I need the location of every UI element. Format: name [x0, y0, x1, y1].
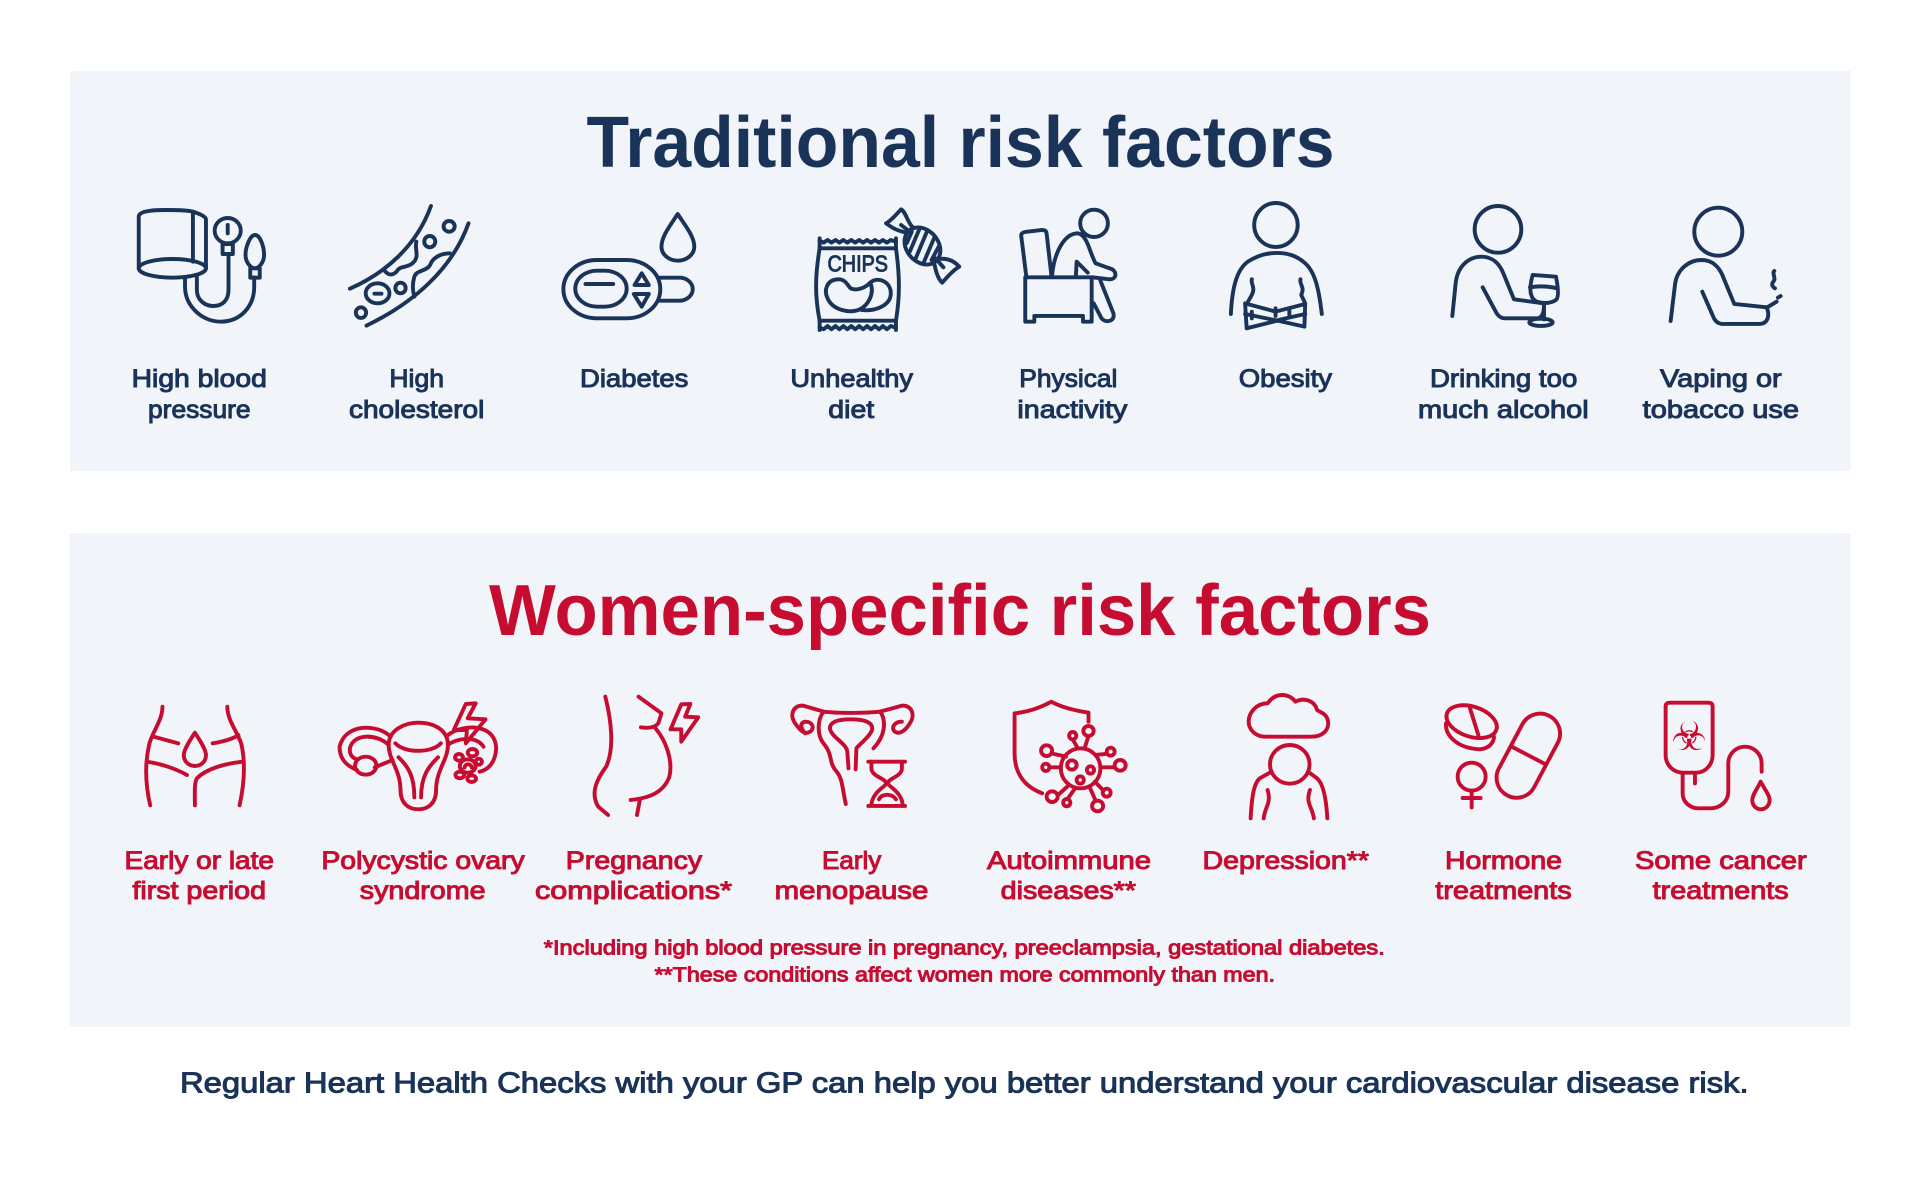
item: polycystic ovary syndrome [321, 703, 525, 905]
footnotes: **These conditions affect women more commonly than men. [654, 963, 1275, 986]
label: pregnancy complications [535, 847, 732, 905]
label: high blood pressure: High blood [132, 365, 267, 393]
icon: shield and virus [1015, 702, 1126, 811]
label: high blood pressure [132, 365, 267, 424]
label: drinking too much alcohol: Drinking too [1430, 365, 1577, 393]
label: autoimmune diseases: diseases** [1001, 877, 1136, 905]
label: pregnancy complications: Pregnancy [566, 847, 703, 875]
icon: blood pressure cuff [139, 210, 264, 322]
icon: pregnant body with bolt [595, 697, 698, 815]
label: depression: Depression** [1202, 847, 1369, 875]
label: unhealthy diet: diet [828, 396, 874, 424]
footnotes [544, 936, 1385, 986]
icon: chemo drip bag: ☣ [1671, 714, 1707, 760]
label: pregnancy complications: complications* [535, 877, 732, 905]
icon: pelvis with drop [146, 707, 244, 805]
icon: person smoking [1671, 208, 1781, 324]
label: high blood pressure: pressure [148, 396, 251, 424]
label: hormone treatments: Hormone [1445, 847, 1562, 875]
label: polycystic ovary syndrome: syndrome [360, 877, 486, 905]
label: unhealthy diet: Unhealthy [790, 365, 914, 393]
label: early menopause: menopause [775, 877, 928, 905]
item: vaping or tobacco use [1643, 208, 1799, 424]
label: autoimmune diseases [987, 847, 1151, 905]
label: early menopause: Early [822, 847, 882, 875]
label: vaping or tobacco use [1643, 365, 1799, 424]
label: some cancer treatments [1635, 847, 1807, 905]
label: hormone treatments: treatments [1435, 877, 1572, 905]
label: vaping or tobacco use: Vaping or [1660, 365, 1782, 393]
label: high cholesterol: High [389, 365, 444, 393]
icon: uterus with hourglass [792, 706, 913, 806]
item: high cholesterol [349, 206, 484, 424]
label: high cholesterol: cholesterol [349, 396, 484, 424]
item: early menopause [775, 706, 928, 905]
item: high blood pressure [132, 210, 267, 424]
icon: glucose meter and drop [563, 214, 694, 318]
label: polycystic ovary syndrome [321, 847, 525, 905]
icon: uterus with cystic ovary and bolt [340, 703, 496, 809]
label: early menopause [775, 847, 928, 905]
label: drinking too much alcohol: much alcohol [1418, 396, 1589, 424]
icon: person with measuring tape [1231, 203, 1322, 328]
panel: traditional risk factors [70, 71, 1851, 471]
label: early or late first period: Early or late [124, 847, 274, 875]
item: physical inactivity [1017, 210, 1128, 424]
label: physical inactivity [1017, 365, 1128, 424]
item: early or late first period [124, 707, 274, 905]
icon: chips packet and candy: CHIPS [828, 250, 888, 276]
icon: chips packet and candy [816, 209, 959, 330]
label: hormone treatments [1435, 847, 1572, 905]
label: autoimmune diseases: Autoimmune [987, 847, 1151, 875]
item: depression [1202, 695, 1369, 875]
label: early or late first period: first period [132, 877, 266, 905]
label: vaping or tobacco use: tobacco use [1643, 396, 1799, 424]
label: physical inactivity: Physical [1019, 365, 1117, 393]
label: polycystic ovary syndrome: Polycystic ovary [321, 847, 525, 875]
label: obesity: Obesity [1239, 365, 1333, 393]
icon: tablet, capsule and female symbol [1442, 699, 1567, 807]
label: drinking too much alcohol [1418, 365, 1589, 424]
footnotes: *Including high blood pressure in pregnancy, preeclampsia, gestational diabetes. [544, 936, 1385, 959]
icon: chemo drip bag [1666, 703, 1770, 809]
label: physical inactivity: inactivity [1017, 396, 1128, 424]
icon: artery with plaque [350, 206, 469, 326]
item: autoimmune diseases [987, 702, 1151, 905]
icon: person under cloud [1249, 695, 1328, 818]
label: high cholesterol [349, 365, 484, 424]
heading: traditional risk factors: Traditional risk factors [586, 103, 1334, 183]
item: diabetes [563, 214, 694, 393]
label: diabetes: Diabetes [580, 365, 688, 393]
label: unhealthy diet [790, 365, 914, 424]
item: hormone treatments [1435, 699, 1572, 905]
label: some cancer treatments: Some cancer [1635, 847, 1807, 875]
icon: person with wine glass [1452, 206, 1558, 326]
item: drinking too much alcohol [1418, 206, 1589, 424]
item: unhealthy diet [790, 209, 959, 424]
panel: women-specific risk factors [69, 533, 1851, 1027]
closing statement: Regular Heart Health Checks with your GP can help you better understand your cardiovascular disease risk. [180, 1067, 1749, 1099]
heading: women-specific risk factors: Women-specific risk factors [489, 571, 1431, 651]
item: obesity [1231, 203, 1333, 393]
label: some cancer treatments: treatments [1653, 877, 1789, 905]
label: early or late first period [124, 847, 274, 905]
item: pregnancy complications [535, 697, 732, 905]
icon: person sitting in armchair [1021, 210, 1115, 322]
item: some cancer treatments [1635, 703, 1807, 905]
